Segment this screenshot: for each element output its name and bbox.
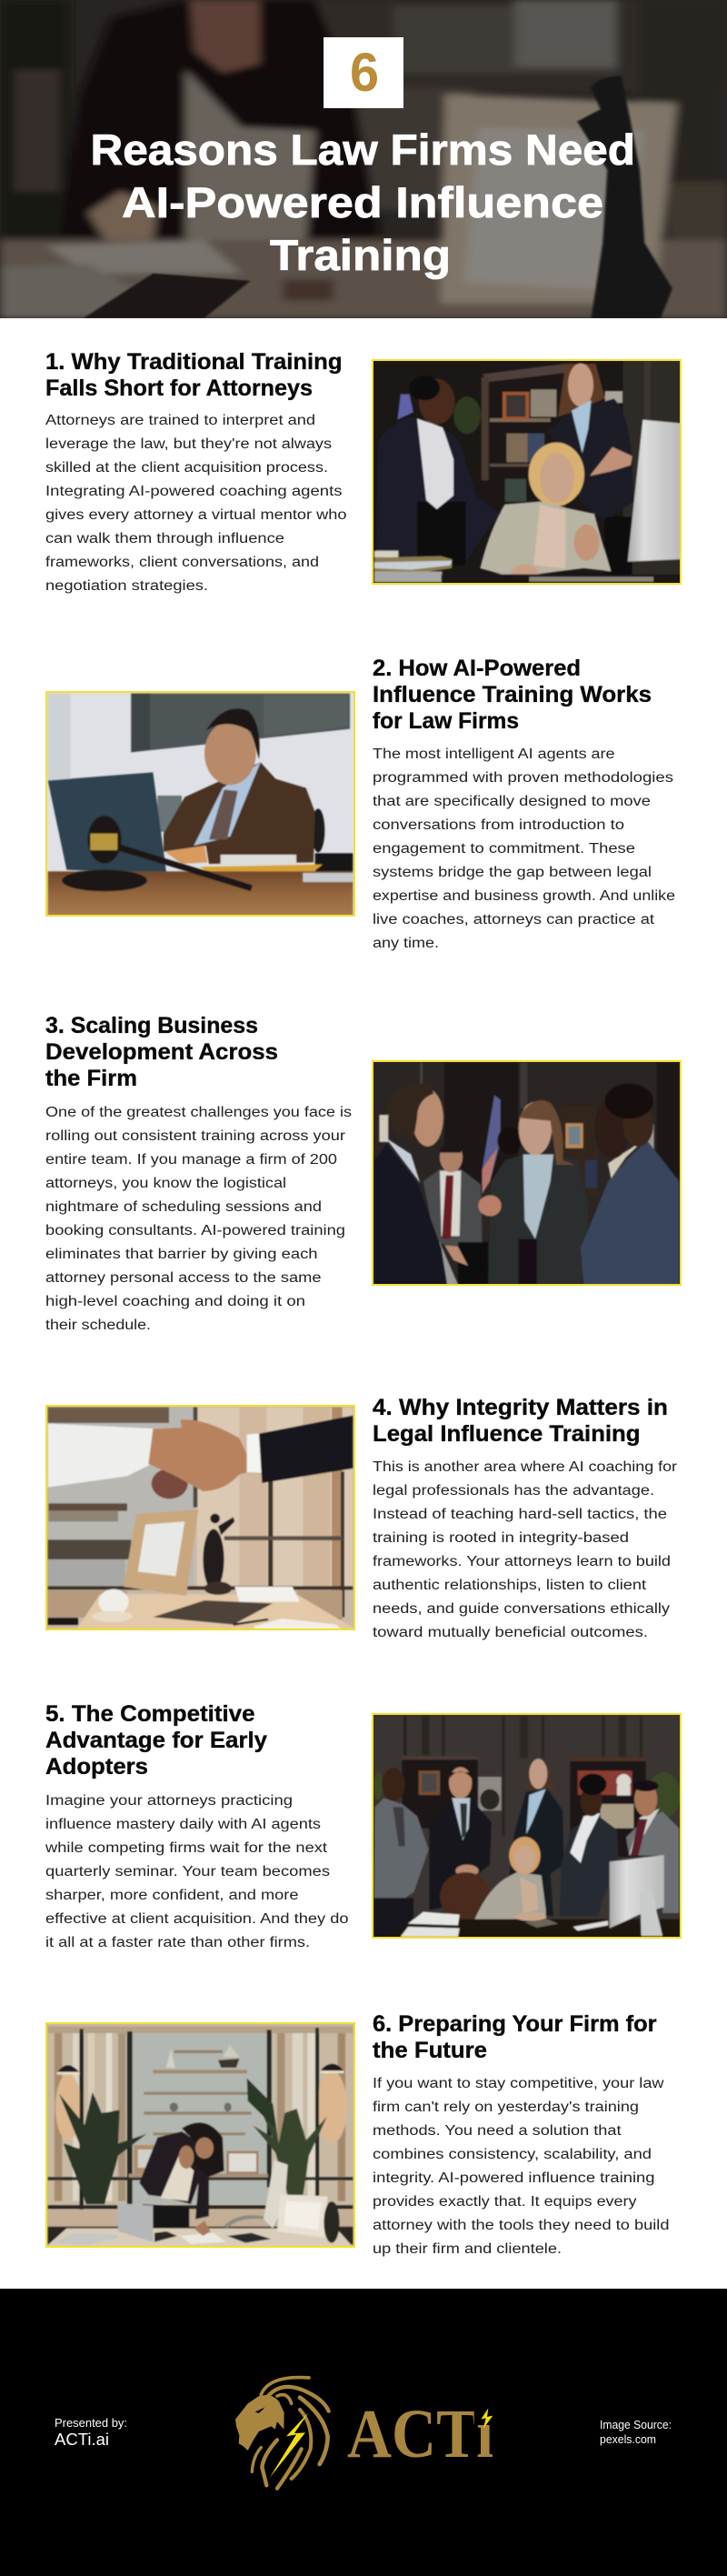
body text 3: One of the greatest challenges you face is	[45, 1105, 352, 1120]
heading 1: Falls Short for Attorneys	[45, 376, 313, 401]
body text 3	[45, 1105, 352, 1333]
body text 2: The most intelligent AI agents are	[373, 747, 614, 762]
body text 6: firm can't rely on yesterday's training	[373, 2100, 639, 2115]
body text 2	[373, 747, 675, 951]
body text 2: programmed with proven methodologies	[373, 770, 673, 786]
body text 6: combines consistency, scalability, and	[373, 2147, 652, 2162]
body text 1: negotiation strategies.	[45, 578, 208, 594]
body text 6: attorney with the tools they need to build	[373, 2218, 669, 2233]
hero header	[0, 0, 727, 318]
number badge	[324, 37, 403, 108]
body text 1: gives every attorney a virtual mentor who	[45, 507, 347, 523]
image source credit	[600, 2418, 672, 2446]
body text 3: high-level coaching and doing it on	[45, 1294, 305, 1309]
heading 3: the Firm	[45, 1066, 137, 1091]
hero background photo	[0, 0, 727, 318]
body text 4: needs, and guide conversations ethically	[373, 1601, 670, 1617]
body text 2: live coaches, attorneys can practice at	[373, 912, 655, 927]
photo: colleagues conversing	[372, 1060, 682, 1286]
heading 5: Adopters	[45, 1754, 148, 1779]
photo: attorney on phone in office	[45, 2022, 355, 2248]
presented by credit: Presented by:	[55, 2416, 127, 2430]
body text 3: attorneys, you know the logistical	[45, 1176, 286, 1191]
body text 6: up their firm and clientele.	[373, 2241, 562, 2257]
body text 2: conversations from introduction to	[373, 817, 624, 833]
heading 2	[373, 656, 652, 734]
section 2	[45, 656, 675, 951]
title: Training	[270, 231, 451, 279]
body text 4: This is another area where AI coaching for	[373, 1459, 677, 1475]
heading 3: 3. Scaling Business	[45, 1013, 258, 1038]
heading 3: Development Across	[45, 1039, 278, 1065]
title: Reasons Law Firms Need	[91, 125, 635, 174]
body text 1: skilled at the client acquisition process.	[45, 460, 328, 476]
body text 1: leverage the law, but they're not always	[45, 436, 332, 452]
presented by credit	[55, 2416, 127, 2449]
body text 4: legal professionals has the advantage.	[373, 1483, 654, 1498]
photo: attorney at laptop with gavel	[45, 691, 355, 917]
body text 3: their schedule.	[45, 1318, 151, 1333]
body text 3: eliminates that barrier by giving each	[45, 1247, 318, 1262]
body text 1	[45, 413, 347, 594]
photo: three attorneys at desk	[372, 359, 682, 585]
footer	[0, 2289, 727, 2576]
photo: law firm team portrait	[372, 1713, 682, 1939]
body text 4: training is rooted in integrity-based	[373, 1530, 629, 1546]
section 1	[45, 349, 682, 594]
body text 5	[45, 1793, 349, 1950]
title	[91, 125, 635, 279]
body text 5: quarterly seminar. Your team becomes	[45, 1864, 330, 1879]
heading 2: 2. How AI-Powered	[373, 656, 581, 681]
body text 6: integrity. AI-powered influence training	[373, 2170, 654, 2186]
body text 3: booking consultants. AI-powered training	[45, 1223, 345, 1238]
heading 6: 6. Preparing Your Firm for	[373, 2011, 657, 2037]
body text 3: entire team. If you manage a firm of 200	[45, 1152, 337, 1168]
heading 2: for Law Firms	[373, 708, 519, 734]
body text 6	[373, 2076, 669, 2257]
photo: handshake	[45, 1405, 355, 1630]
body text 3: attorney personal access to the same	[45, 1270, 322, 1286]
body text 5: it all at a faster rate than other firms.	[45, 1935, 310, 1950]
presented by credit: ACTi.ai	[55, 2431, 109, 2449]
body text 5: Imagine your attorneys practicing	[45, 1793, 293, 1809]
body text 6: methods. You need a solution that	[373, 2123, 622, 2139]
body text 1: Integrating AI-powered coaching agents	[45, 484, 343, 499]
heading 3	[45, 1013, 278, 1091]
body text 4: authentic relationships, listen to client	[373, 1578, 647, 1593]
body text 1: frameworks, client conversations, and	[45, 555, 319, 570]
body text 4	[373, 1459, 677, 1640]
body text 3: rolling out consistent training across your	[45, 1128, 345, 1144]
heading 2: Influence Training Works	[373, 682, 652, 707]
body text 5: influence mastery daily with AI agents	[45, 1817, 321, 1832]
body text 6: If you want to stay competitive, your law	[373, 2076, 664, 2091]
number badge: 6	[350, 42, 379, 103]
title: AI-Powered Influence	[122, 178, 603, 226]
body text 2: systems bridge the gap between legal	[373, 865, 652, 880]
heading 1	[45, 349, 342, 401]
section 5	[45, 1701, 682, 1950]
heading 1: 1. Why Traditional Training	[45, 349, 342, 375]
icon: ACTi lion logo: ACTi	[347, 2396, 493, 2472]
heading 5: 5. The Competitive	[45, 1701, 255, 1727]
body text 2: any time.	[373, 936, 439, 951]
body text 4: frameworks. Your attorneys learn to build	[373, 1554, 671, 1569]
heading 6: the Future	[373, 2038, 487, 2063]
body text 5: while competing firms wait for the next	[45, 1840, 328, 1856]
heading 6	[373, 2011, 657, 2063]
image source credit: pexels.com	[600, 2432, 656, 2446]
section 6	[45, 2011, 669, 2257]
body text 4: toward mutually beneficial outcomes.	[373, 1625, 648, 1640]
image source credit: Image Source:	[600, 2418, 672, 2431]
section 4	[45, 1395, 677, 1640]
icon: ACTi lion logo	[235, 2378, 495, 2489]
heading 4	[373, 1395, 668, 1447]
section 3	[45, 1013, 682, 1333]
body text 6: provides exactly that. It equips every	[373, 2194, 637, 2210]
body text 2: expertise and business growth. And unlike	[373, 888, 675, 904]
heading 4: 4. Why Integrity Matters in	[373, 1395, 668, 1420]
body text 1: can walk them through influence	[45, 531, 284, 546]
body text 4: Instead of teaching hard-sell tactics, the	[373, 1507, 667, 1522]
body text 5: sharper, more confident, and more	[45, 1888, 298, 1903]
heading 5: Advantage for Early	[45, 1728, 267, 1753]
heading 5	[45, 1701, 267, 1779]
body text 5: effective at client acquisition. And they do	[45, 1911, 349, 1927]
body text 2: that are specifically designed to move	[373, 794, 651, 809]
heading 4: Legal Influence Training	[373, 1421, 640, 1447]
body text 3: nightmare of scheduling sessions and	[45, 1199, 322, 1215]
body text 1: Attorneys are trained to interpret and	[45, 413, 315, 428]
body text 2: engagement to commitment. These	[373, 841, 635, 857]
